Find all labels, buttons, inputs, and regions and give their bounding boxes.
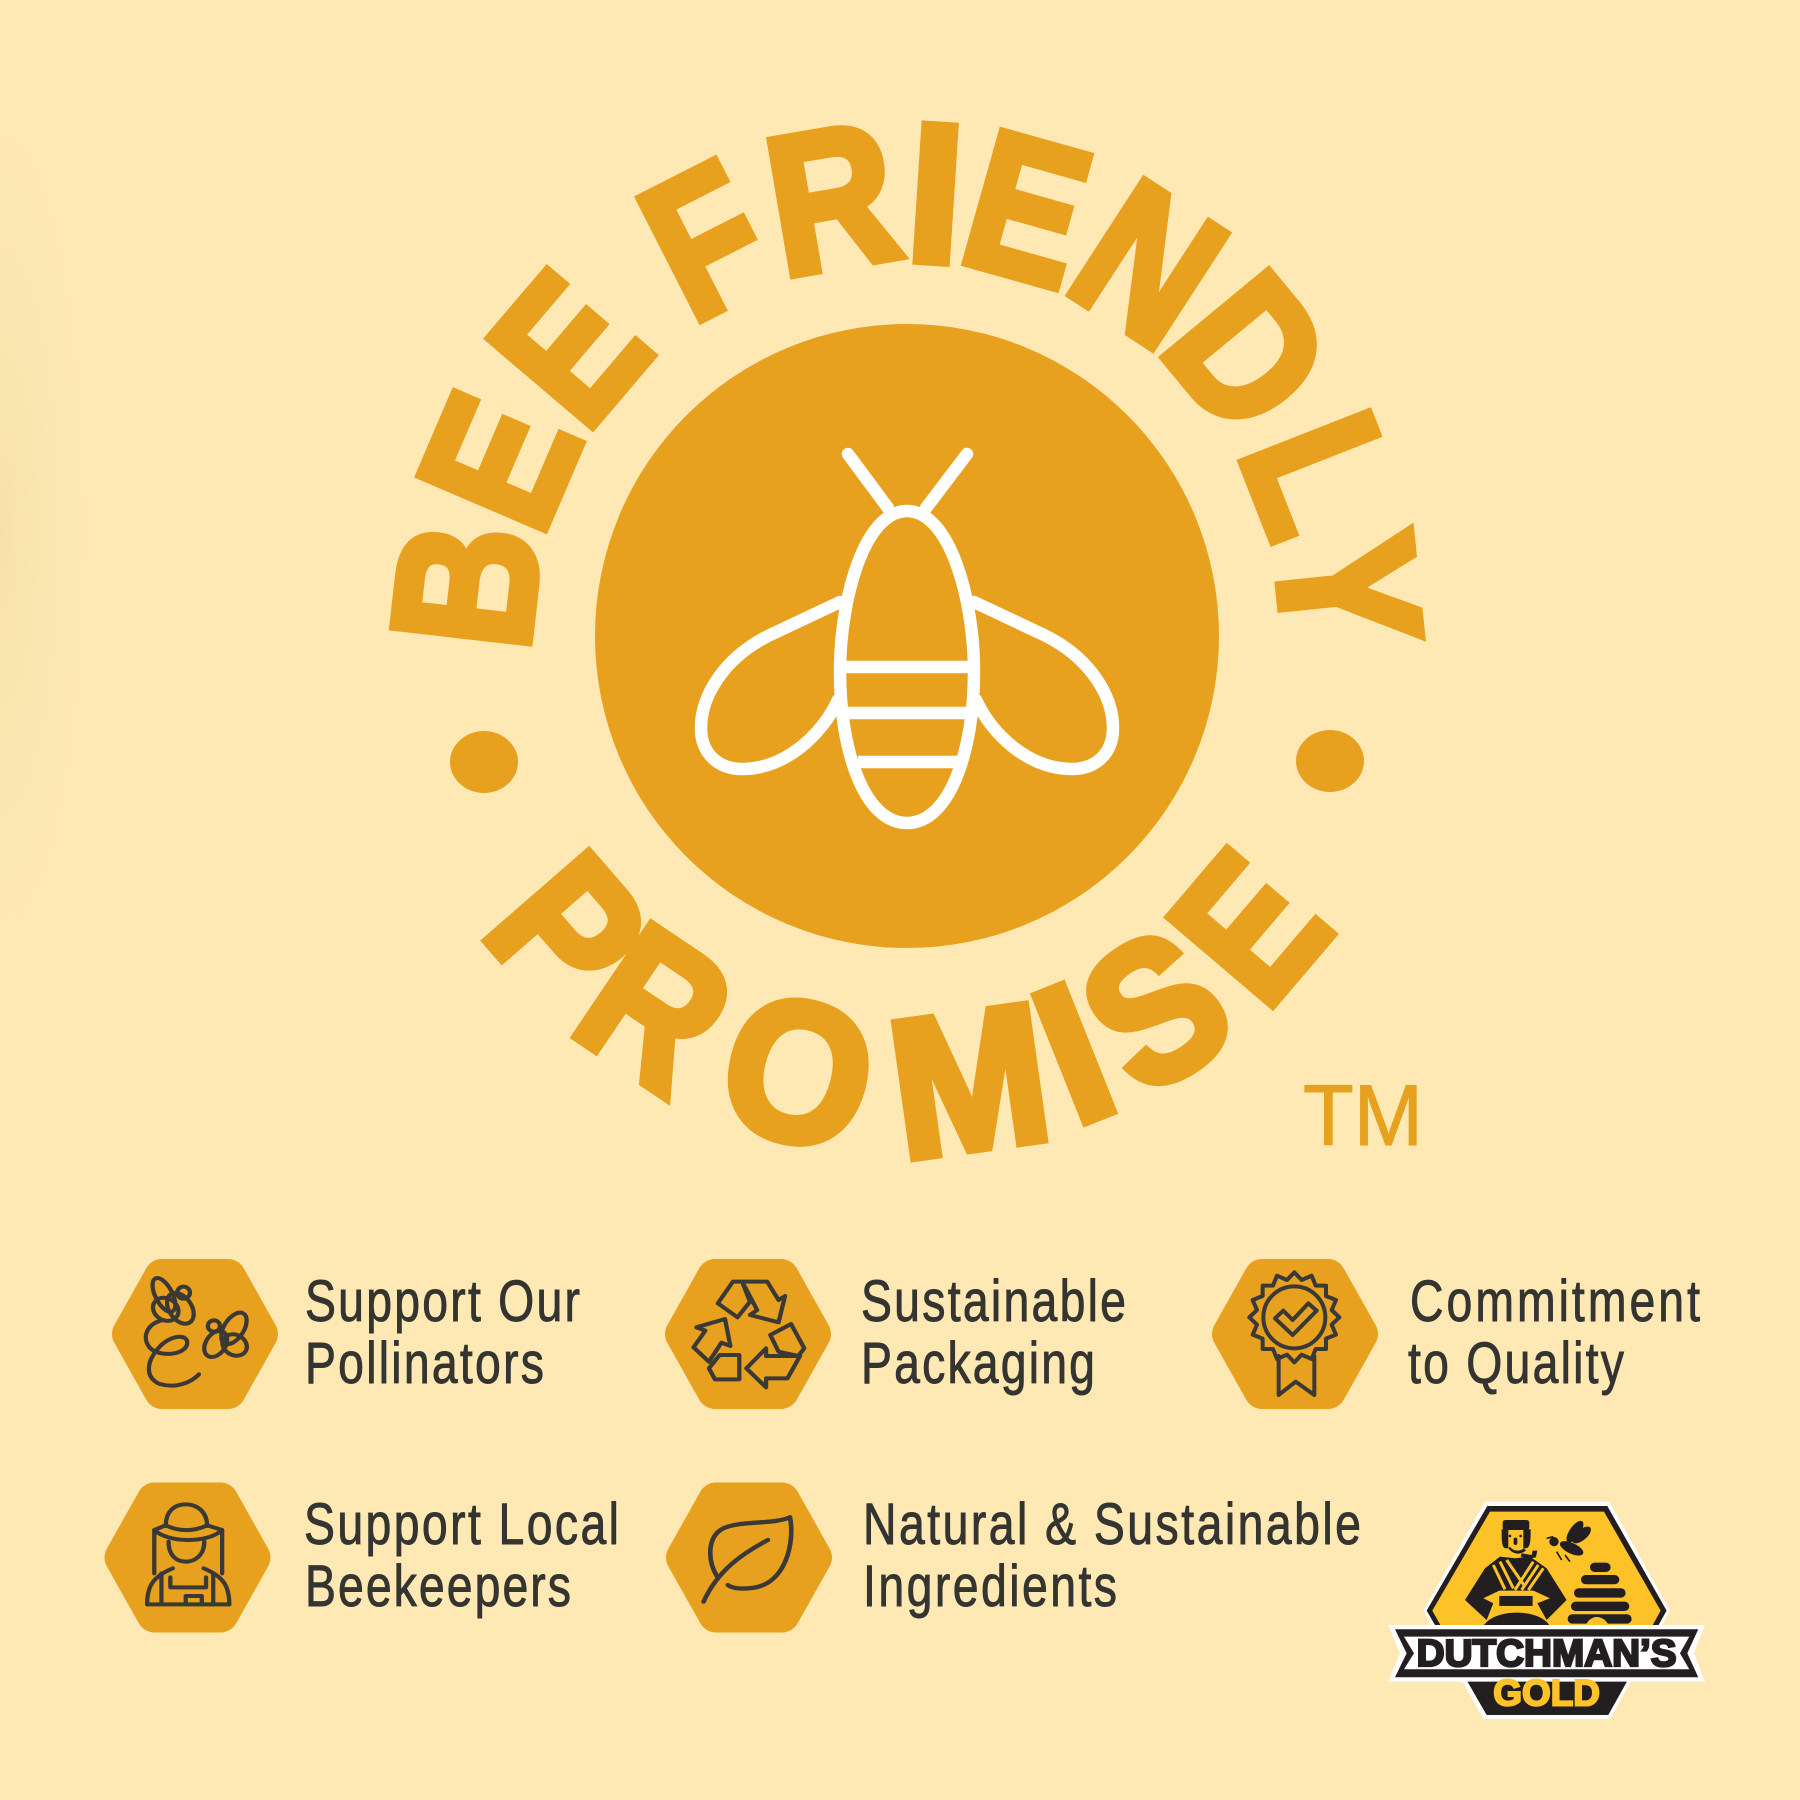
- logo text: DUTCHMAN'S: DUTCHMAN’S: [1417, 1632, 1677, 1674]
- logo: dutchman's gold: [1388, 1502, 1705, 1719]
- feature: natural and sustainable ingredients: [684, 1492, 1361, 1619]
- heading: PROMISE: I: [1008, 941, 1140, 1166]
- text: commitment to quality: [1408, 1269, 1700, 1396]
- text: natural and sustainable ingredients: [863, 1492, 1361, 1619]
- icon: white bee: [701, 454, 1113, 823]
- heading: BEE FRIENDLY: F: [610, 119, 801, 362]
- heading: BEE FRIENDLY: E: [375, 366, 622, 556]
- heading: PROMISE: P: [446, 816, 688, 1047]
- icon: left dot: [450, 731, 518, 793]
- logo badge shape: [1423, 1502, 1670, 1719]
- heading: PROMISE: E: [1129, 813, 1369, 1041]
- heading: PROMISE: R: [542, 883, 769, 1135]
- text: support our pollinators: Pollinators: [305, 1331, 544, 1396]
- emblem: bee friendly promise badge: [349, 81, 1464, 1201]
- text: natural and sustainable ingredients: Natural & Sustainable: [863, 1492, 1361, 1557]
- icon: hexagon with recycle arrows: [683, 1277, 813, 1391]
- heading: PROMISE: S: [1045, 886, 1267, 1136]
- feature: commitment to quality: [1230, 1269, 1700, 1396]
- text: natural and sustainable ingredients: Ingredients: [863, 1554, 1117, 1619]
- text: support local beekeepers: Support Local: [304, 1492, 619, 1557]
- heading: BEE FRIENDLY: E: [449, 234, 689, 462]
- heading: BEE FRIENDLY: R: [752, 81, 913, 318]
- heading: PROMISE: [446, 813, 1369, 1201]
- heading: BEE FRIENDLY: L: [1199, 386, 1442, 562]
- icon: hexagon with rosette: [1230, 1272, 1360, 1395]
- text: support local beekeepers: Beekeepers: [305, 1554, 571, 1619]
- feature: support local beekeepers: [122, 1492, 619, 1619]
- icon: hexagon with bees: [130, 1275, 260, 1391]
- text: commitment to quality: to Quality: [1408, 1331, 1625, 1396]
- text: sustainable packaging: Sustainable: [861, 1269, 1126, 1334]
- heading: BEE FRIENDLY: E: [943, 87, 1111, 330]
- heading: BEE FRIENDLY: B: [349, 513, 583, 658]
- text: support our pollinators: [305, 1269, 580, 1396]
- text: sustainable packaging: Packaging: [861, 1331, 1095, 1396]
- logo: beekeeper figure: [1465, 1520, 1567, 1631]
- logo: skep hive: [1568, 1563, 1632, 1628]
- icon: right dot: [1296, 730, 1364, 792]
- text: support local beekeepers: [304, 1492, 619, 1619]
- heading: PROMISE: M: [877, 961, 1062, 1201]
- feature: support our pollinators: [130, 1269, 580, 1396]
- text: support our pollinators: Support Our: [305, 1269, 580, 1334]
- text: sustainable packaging: [861, 1269, 1126, 1396]
- icon: hexagon with leaf: [684, 1500, 814, 1614]
- feature: sustainable packaging: [683, 1269, 1126, 1396]
- heading: BEE FRIENDLY: N: [1038, 138, 1260, 389]
- heading: PROMISE: O: [701, 947, 896, 1197]
- icon: hexagon with beekeeper: [122, 1500, 252, 1614]
- logo: banner: [1388, 1625, 1705, 1682]
- logo: bee: [1547, 1518, 1594, 1562]
- logo text: GOLD: GOLD: [1493, 1673, 1600, 1714]
- logo: chest straps: [1493, 1560, 1543, 1590]
- heading: BEE FRIENDLY: I: [901, 82, 970, 305]
- heading: BEE FRIENDLY: [349, 81, 1464, 658]
- heading: BEE FRIENDLY: Y: [1233, 523, 1464, 657]
- text: commitment to quality: Commitment: [1410, 1269, 1700, 1334]
- trademark: TM: [1303, 1068, 1423, 1164]
- heading: BEE FRIENDLY: D: [1124, 235, 1373, 472]
- circle: orange disc: [595, 324, 1219, 948]
